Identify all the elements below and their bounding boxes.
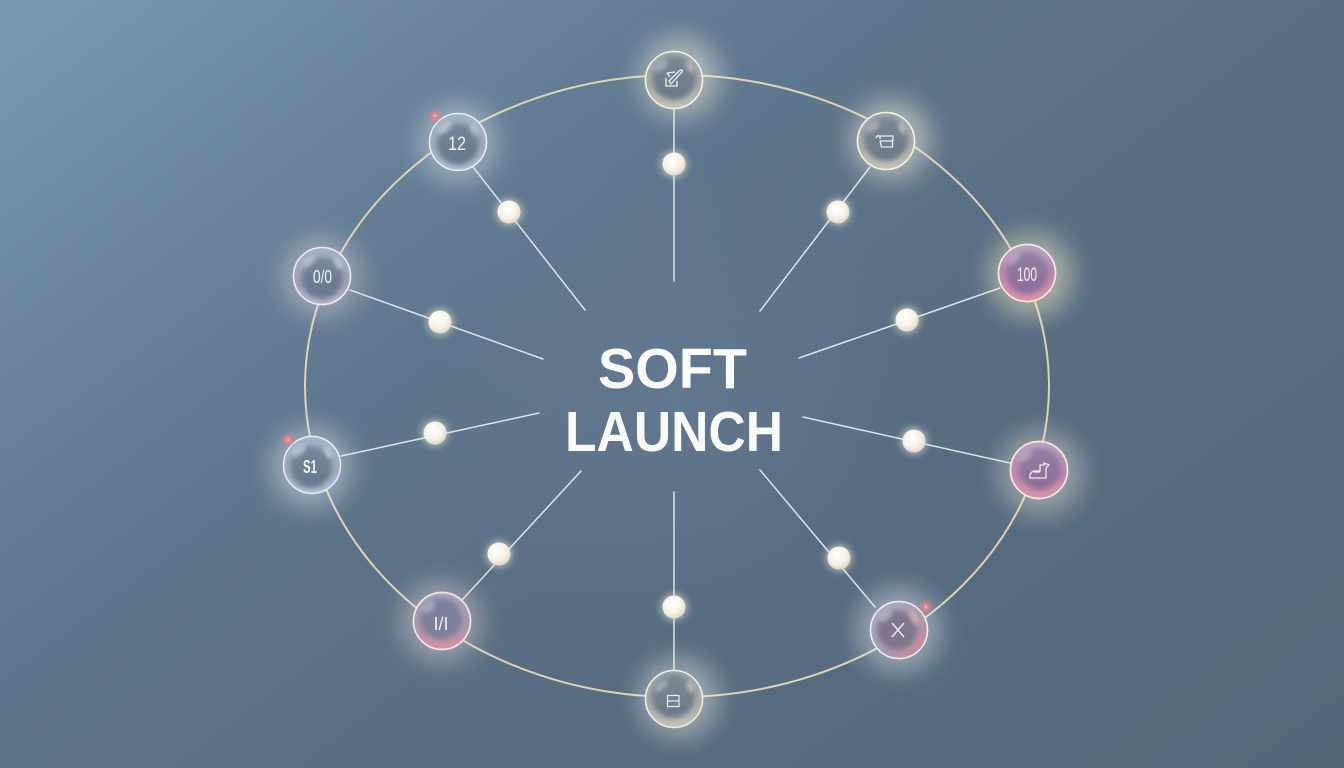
bubble: right lower, boot icon	[999, 431, 1083, 515]
title	[565, 337, 783, 464]
bubble: right upper, 100	[989, 233, 1073, 317]
bubble: bottom left, I/I	[401, 582, 481, 662]
bubble: bottom right, x	[857, 588, 941, 672]
label: 100: 100	[1017, 265, 1037, 286]
icon: boot	[1030, 463, 1049, 478]
pearl nodes	[422, 151, 927, 620]
title: SOFT	[598, 337, 747, 401]
red sparks	[280, 108, 934, 615]
spokes	[341, 109, 1010, 670]
icon: stacked box	[876, 135, 893, 147]
label: I/I: I/I	[433, 614, 449, 634]
bubble: left upper, 00	[282, 237, 362, 317]
bubble: top right, box icon	[851, 100, 931, 180]
bubble: left lower, S1	[271, 427, 351, 507]
icon: x	[892, 623, 904, 637]
label: 00: 0/0	[313, 267, 332, 287]
label: 12: 12	[448, 134, 466, 155]
title: LAUNCH	[565, 400, 783, 464]
bubble: top left, 12	[418, 103, 498, 183]
label: S1: S1	[303, 457, 317, 477]
bubble: bottom, panel icon	[639, 658, 719, 738]
orbit ring	[305, 75, 1049, 697]
icon: panel	[668, 696, 679, 706]
icon: pen	[666, 70, 682, 86]
bubble: top, pen icon	[640, 37, 720, 117]
